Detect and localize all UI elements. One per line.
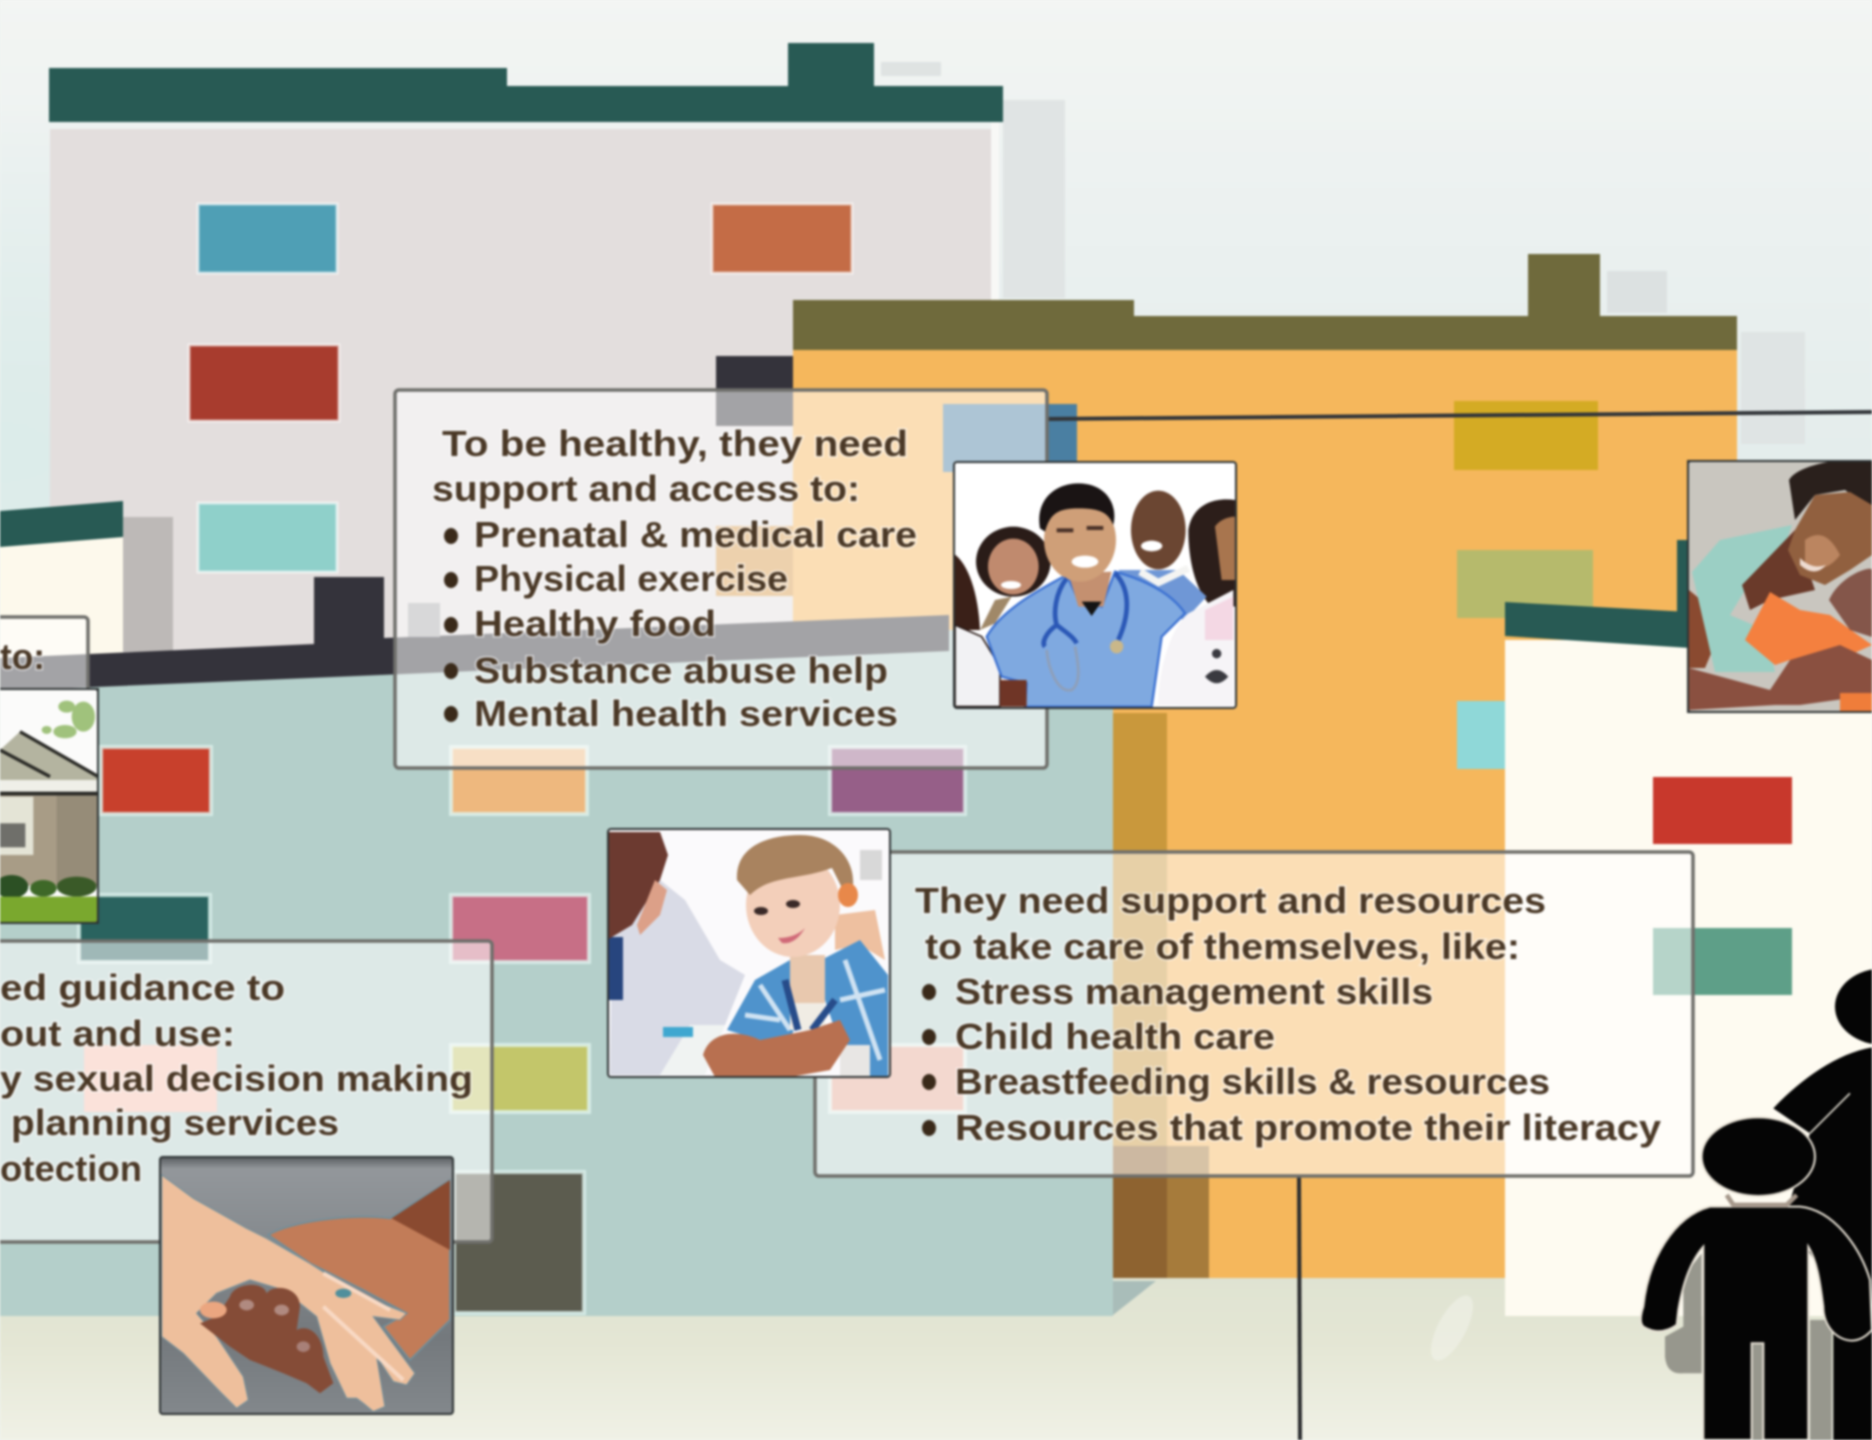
ground smudge [1423, 1290, 1481, 1366]
panel heading: They need support and resources [915, 880, 1546, 921]
bullet list: Prenatal & medical care [474, 514, 917, 555]
child neck [1727, 1195, 1797, 1205]
guidance text: out and use: [0, 1013, 235, 1054]
guidance text [0, 967, 473, 1189]
panel: guidance, cropped at left edge [0, 941, 492, 1242]
panel: self care resources [815, 852, 1693, 1176]
bullet list: Child health care [955, 1016, 1275, 1057]
grey shadow strips [1665, 1253, 1832, 1440]
bullet list: Substance abuse help [474, 650, 888, 691]
adult arm highlight [1810, 1093, 1850, 1133]
figures: adult and child silhouettes [1641, 968, 1872, 1440]
building: grey with teal roof [49, 43, 1065, 689]
adult silhouette [1773, 968, 1872, 1440]
bullet list: Mental health services [474, 693, 898, 734]
bullet list: Stress management skills [955, 971, 1433, 1012]
guidance text: planning services [11, 1102, 339, 1143]
bullet list: Breastfeeding skills & resources [955, 1061, 1550, 1102]
ground [0, 1275, 1872, 1440]
bullet list [444, 514, 917, 734]
child silhouette [1641, 1117, 1872, 1440]
guidance text: otection [0, 1148, 142, 1189]
building: cream left with teal roof [0, 501, 173, 670]
panel heading [915, 880, 1546, 967]
panel heading: support and access to: [432, 468, 860, 509]
bullet list: Physical exercise [474, 558, 788, 599]
panel heading: to take care of themselves, like: [925, 926, 1520, 967]
photo: house [0, 688, 99, 925]
bullet list: Resources that promote their literacy [955, 1107, 1661, 1148]
bullet list [922, 971, 1661, 1148]
panel heading: To be healthy, they need [442, 423, 908, 464]
guidance text: ed guidance to [0, 967, 285, 1008]
panel: healthy access [395, 390, 1047, 768]
guidance text: y sexual decision making [0, 1058, 473, 1099]
building: cream right with teal roof [1505, 540, 1872, 1316]
building: teal-green with dark roof [0, 577, 1156, 1316]
connector lines [1047, 412, 1872, 1440]
building: orange with olive roof [716, 254, 1805, 1278]
photo: doctor and child [607, 828, 891, 1078]
callout text: to: [0, 636, 45, 677]
photo: mother and child [1687, 459, 1872, 713]
panel heading [432, 423, 908, 509]
photo: medical team [953, 461, 1237, 709]
bullet list: Healthy food [474, 603, 716, 644]
panel: top-left cropped callout [0, 617, 88, 707]
photo: holding hands [159, 1156, 454, 1415]
